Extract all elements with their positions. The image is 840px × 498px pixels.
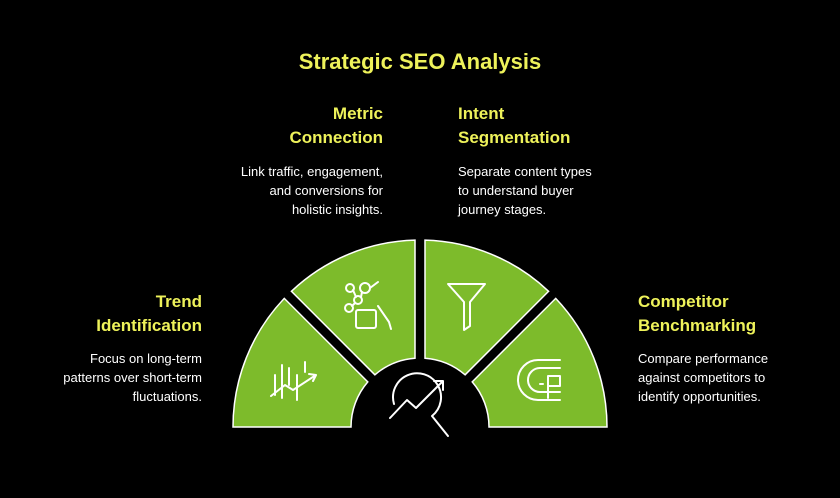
icon: network hand [345, 282, 391, 329]
heading: metric connection: Metric [333, 104, 383, 123]
heading: intent segmentation: Intent [458, 104, 504, 123]
heading: metric connection [290, 104, 383, 147]
heading: trend identification: Identification [96, 316, 202, 335]
heading: competitor benchmarking [638, 292, 756, 335]
heading: metric connection: Connection [290, 128, 383, 147]
segment: metric [291, 240, 415, 375]
text: competitor benchmarking [638, 351, 768, 404]
icon: trend chart [271, 362, 316, 400]
text: trend identification: fluctuations. [133, 389, 202, 404]
text: intent segmentation: to understand buyer [458, 183, 574, 198]
text: intent segmentation: journey stages. [458, 202, 546, 217]
text: competitor benchmarking: identify opportunities. [638, 389, 761, 404]
text: metric connection: and conversions for [270, 183, 383, 198]
icon: race track [518, 360, 560, 400]
text: intent segmentation [458, 164, 592, 217]
text: trend identification [63, 351, 202, 404]
icon: funnel [448, 284, 485, 330]
heading: intent segmentation: Segmentation [458, 128, 570, 147]
segment: competitor [472, 298, 607, 427]
heading: competitor benchmarking: Benchmarking [638, 316, 756, 335]
segment: trend [233, 298, 368, 427]
heading: trend identification: Trend [156, 292, 202, 311]
heading: intent segmentation [458, 104, 570, 147]
icon: central analysis [390, 373, 448, 436]
text: metric connection: holistic insights. [292, 202, 383, 217]
heading: competitor benchmarking: Competitor [638, 292, 729, 311]
text: trend identification: patterns over short-term [63, 370, 202, 385]
segment: intent [425, 240, 549, 375]
text: competitor benchmarking: Compare performance [638, 351, 768, 366]
title: Strategic SEO Analysis [299, 49, 541, 74]
text: metric connection [241, 164, 383, 217]
text: trend identification: Focus on long-term [90, 351, 202, 366]
text: intent segmentation: Separate content types [458, 164, 592, 179]
text: competitor benchmarking: against competitors to [638, 370, 765, 385]
text: metric connection: Link traffic, engagement, [241, 164, 383, 179]
heading: trend identification [96, 292, 202, 335]
